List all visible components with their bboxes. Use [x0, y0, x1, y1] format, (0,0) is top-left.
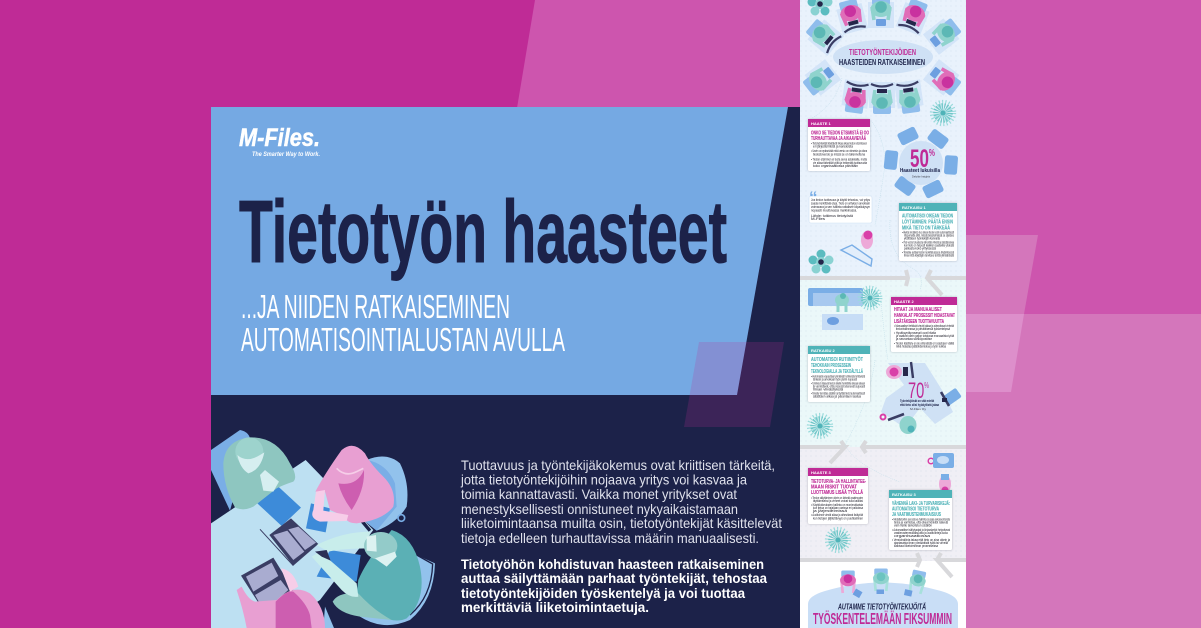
- quote box: Lähde: tutkimus tietotyöstä: [811, 214, 853, 218]
- table with 50% stat: %: [929, 148, 935, 159]
- closing dome and heading: [808, 568, 958, 628]
- intro text: [460, 457, 782, 546]
- three people: [840, 568, 928, 599]
- card: haaste 1: eri järjestelmistä ja kansioista: [813, 144, 853, 148]
- card: ratkaisu 1: • Yksi versio totuudesta vähentää virheitä ja säästää aikaa: [902, 240, 954, 244]
- title: Tietotyön haasteet: [239, 182, 727, 281]
- chair: pink person: [361, 456, 408, 532]
- card: ratkaisu 1: • Tekoäly auttaa tiedon luokittelussa ja löytämisessä: [902, 250, 954, 254]
- card: ratkaisu 1: kun tieto on helposti kaikkien saatavilla yhdestä: [904, 244, 954, 248]
- folder: [257, 487, 301, 526]
- quote box: M-Files: [811, 217, 826, 221]
- intro bold text: tietotyöntekijöiden työskentelyä ja voi tuottaa: [461, 585, 745, 601]
- person: [939, 474, 951, 494]
- table with 50% stat: Haasteet lukuisilla: [900, 168, 940, 174]
- quote box: nopeasti muuttuvassa markkinassa.: [811, 208, 857, 212]
- card: ratkaisu 3: kaikissa liiketoiminnan prosesseissa: [894, 544, 938, 548]
- card: ratkaisu 2: ja varmistavat, että prosessit etenevät sujuvasti: [812, 384, 865, 388]
- card: ratkaisu 3: organisaatiossa: [894, 534, 930, 538]
- sofa with person: [808, 288, 863, 330]
- subtitle: [241, 288, 565, 358]
- card: ratkaisu 3: • Metatietoihin perustuva hallinta suojaa arkaluontoista: [892, 518, 950, 522]
- card: haaste 1: ONKO SE TIEDON ETSIMISTÄ EI OO: [811, 130, 869, 136]
- people around the table: [800, 0, 964, 115]
- person with desk: [841, 230, 873, 266]
- card: ratkaisu 2: • Tekoäly tunnistaa sisällön ja täyttää tiedot automaattisesti: [811, 392, 865, 396]
- heading ellipse: [833, 40, 933, 74]
- top plant: [808, 0, 832, 16]
- pink person: [312, 446, 394, 523]
- 70% stat group: Työntekijöistä on sitä mieltä: [900, 399, 934, 403]
- card: ratkaisu 3: [889, 490, 952, 550]
- card: ratkaisu 2: tärkeän ja arvokkaan työn pariin nopeasti: [813, 378, 857, 382]
- card: haaste 2: ja vaativat usein paljon toistuvaa manuaalista työtä: [895, 334, 954, 338]
- table: [211, 460, 373, 628]
- card: haaste 2: LISÄTÄKSEEN TUOTTAVUUTTA: [894, 318, 944, 325]
- card: haaste 2: • Tiedon käsittely ei ole yhtenäistä eri osastojen välillä: [894, 342, 954, 346]
- intro text: liiketoimintaansa muilta osin, tietotyöntekijät käsittelevät: [461, 515, 782, 531]
- icon: coffee cup: [928, 453, 954, 468]
- table with 50% stat: [884, 126, 958, 199]
- intro text: toimia kannattavasti. Vaikka monet yritykset ovat: [461, 486, 737, 502]
- teal person: [312, 530, 435, 625]
- card: haaste 1: TURHAUTTAVAA JA AIKAAVIEVÄÄ: [811, 135, 866, 142]
- card: haaste 2: tiedonhallinnassa ja päivittäisessä työskentelyssä: [896, 327, 950, 331]
- card: haaste 1: tiedostoversio ja missä se on tallennettuna: [813, 152, 865, 156]
- closing dome and heading: AUTAMME TIETOTYÖNTEKIJÖITÄ: [837, 602, 926, 612]
- heading ellipse: TIETOTYÖNTEKIJÖIDEN: [849, 48, 916, 57]
- 70% stat group: 70: [908, 378, 932, 403]
- card: ratkaisu 3: ajantasaista ilman ylimääräistä työtä tai virheitä: [894, 541, 948, 545]
- card: haaste 1: • Usein on epäselvää mikä versio on viimeisin ja oikea: [811, 149, 867, 153]
- table with 50% stat: Deloitte Insights: [912, 174, 930, 178]
- bottom pink person: [237, 568, 334, 628]
- card: haaste 1: vie aikaa tärkeältä työltä ja heikentää tuottavuutta: [813, 161, 867, 165]
- chair: green person: [211, 430, 250, 511]
- card: haaste 3: [808, 468, 868, 524]
- card: haaste 3: täyttämiseksi ja virheet voivat tulla kalliiksi: [813, 499, 863, 503]
- quote box: “: [809, 188, 818, 207]
- card: haaste 2: HANKALAT PROSESSIT HIDASTAVAT: [894, 313, 955, 319]
- card: ratkaisu 1: ilman että käyttäjän tarvitsee tehdä ylimääräistä: [904, 254, 954, 258]
- laptop: [260, 518, 318, 566]
- card: haaste 1: [808, 119, 870, 171]
- card: haaste 2: [891, 297, 957, 352]
- card: ratkaisu 3: • Automaattiset säilytysajat ja kirjausketjut helpottavat: [892, 528, 950, 532]
- card: ratkaisu 1: yksittäisen työntekijän kannalta: [904, 236, 940, 240]
- card: ratkaisu 3: AUTOMATISOI TIETOTURVA: [892, 506, 939, 512]
- card: ratkaisu 2: • Automaatio vapauttaa työntekijät rutiineista tehtävistä: [811, 374, 865, 378]
- panel: infographic strip: [800, 0, 966, 628]
- intro text: tietoja edelleen turhauttavissa määrin manuaalisesti.: [461, 530, 759, 546]
- card: haaste 3: ja järjestelmissä: [812, 509, 847, 513]
- card: haaste 2: HAASTE 2: [894, 299, 915, 304]
- plant: [831, 533, 845, 547]
- 70% stat group: %: [924, 381, 929, 390]
- card: haaste 3: • Tiedon säilyttäminen oikein on tärkeää vaatimusten: [811, 496, 863, 500]
- closing dome and heading: TYÖSKENTELEMÄÄN FIKSUMMIN: [813, 609, 952, 628]
- card: ratkaisu 3: vaatimustenmukaisuutta ja auditointeja koko: [894, 531, 948, 535]
- card: haaste 3: TIETOTURVA- JA HALLINTATEE-: [811, 479, 866, 485]
- card: haaste 3: kun tietoa on hajallaan useissa eri paikoissa: [813, 506, 863, 510]
- plant: [808, 250, 834, 274]
- intro text: menestyksellisesti onnistuneet nykyaikaistamaan: [461, 501, 738, 517]
- paper: [306, 503, 330, 532]
- plant: [864, 292, 876, 304]
- card: haaste 1: koko organisaatiossa päivittäin: [813, 164, 858, 168]
- quote box: [809, 188, 872, 223]
- card: ratkaisu 2: RATKAISU 2: [811, 348, 835, 353]
- quote box: Jos tiedon tuottavuus ja käyttö tehostuu, voi yritys: [811, 198, 870, 202]
- subtitle: AUTOMATISOINTIALUSTAN AVULLA: [241, 321, 565, 358]
- card: ratkaisu 3: RATKAISU 3: [892, 492, 916, 497]
- card: haaste 2: ja seurantaa sähköpostitse: [895, 337, 932, 341]
- subtitle: ...JA NIIDEN RATKAISEMINEN: [241, 288, 510, 325]
- card: haaste 3: HAASTE 3: [811, 470, 832, 475]
- quote box: voimavara ja sen hallinta ratkaisee kilpailukyvyn: [811, 205, 870, 209]
- card: ratkaisu 1: LÖYTÄMINEN: PÄÄTÄ ENSIN: [902, 218, 953, 226]
- 70% stat group: M-Files Oy: [910, 407, 927, 411]
- card: haaste 2: • Manuaaliset tehtävät vievät aikaa ja aiheuttavat virheitä: [894, 324, 954, 328]
- card: haaste 1: HAASTE 1: [811, 121, 832, 126]
- card: ratkaisu 2: ilman viivästyksiä: [813, 388, 843, 392]
- card: ratkaisu 3: • Versiohallinta takaa että tieto on aina oikein ja: [892, 538, 950, 542]
- table with 50% stat: 50: [910, 145, 938, 173]
- card: ratkaisu 2: TEHOKKAIN PROSESSEIN: [811, 363, 851, 369]
- translucent parallelogram: [684, 342, 784, 427]
- card: ratkaisu 3: vain heille tarkoitetun sisällön: [894, 524, 932, 528]
- card: ratkaisu 3: tietoa ja varmistaa, että oikeat henkilöt näkevät: [894, 520, 948, 524]
- card: ratkaisu 1: [899, 203, 957, 261]
- card: ratkaisu 2: säästäen aikaa ja parantaen laatua: [813, 394, 861, 398]
- logo: M-Files: The Smarter Way to Work.: [252, 151, 320, 158]
- card: haaste 3: • Käyttöoikeuksien hallinta on monimutkaista: [811, 503, 863, 507]
- tablet: [241, 558, 294, 602]
- intro bold text: auttaa säilyttämään parhaat työntekijät, tehostaa: [461, 570, 767, 586]
- intro text: Tuottavuus ja työntekijäkokemus ovat kriittisen tärkeitä,: [461, 457, 775, 473]
- card: haaste 3: kun tietojen jäljitettävyys on puutteellinen: [813, 516, 863, 520]
- green person: [223, 437, 295, 509]
- card: ratkaisu 2: • Työnkulut ohjaavat tiedon oikeille henkilöille oikeaan aikaan: [811, 382, 865, 386]
- card: haaste 3: LUOTTAMUS LISÄÄ TYÖLLÄ: [811, 489, 863, 496]
- card: ratkaisu 3: VÄHENNÄ LAKI- JA TURVARISKEJÄ:: [892, 500, 950, 507]
- 70% stat group: että tieto olisi hyödyllistä jakaa: [900, 403, 939, 407]
- plant: [813, 419, 827, 433]
- card: ratkaisu 2: AUTOMATISOI RUTIINITYÖT: [811, 356, 864, 363]
- card: haaste 2: • Hyväksyntäprosessit ovat hitaita: [894, 331, 936, 335]
- card: haaste 2: HITAAT JA MANUAALISET: [894, 307, 942, 313]
- plant: [936, 106, 950, 120]
- card: haaste 3: MAAN RISKIT TUOVAT: [811, 484, 858, 490]
- 70% stat group: [880, 362, 962, 434]
- heading ellipse: HAASTEIDEN RATKAISEMINEN: [839, 58, 925, 67]
- dotted connector lines: [812, 78, 921, 482]
- intro bold text: merkittäviä liiketoimintaetuja.: [461, 599, 649, 615]
- blue title panel: [211, 107, 788, 395]
- intro bold text: [461, 556, 767, 615]
- card: ratkaisu 1: RATKAISU 1: [902, 205, 926, 210]
- panel: report cover: [211, 107, 800, 628]
- card: ratkaisu 2: TEKNOLOGIALLA JA TEKOÄLYLLÄ: [811, 368, 863, 375]
- illustration: team around table: [211, 430, 435, 628]
- logo: M-Files: M-Files.: [239, 124, 320, 152]
- card: ratkaisu 1: riippumatta siitä, missä järjestelmässä se sijaitsee: [904, 234, 954, 238]
- card: haaste 1: • Tiedon etsiminen ei tuota arvoa asiakkaille, mutta: [811, 158, 867, 162]
- card: ratkaisu 1: paikasta koko yrityksessä: [904, 246, 936, 250]
- intro bold text: Tietotyöhön kohdistuvan haasteen ratkaiseminen: [461, 556, 764, 572]
- quote box: saada merkittäviä etuja. Tieto on yrityksen arvokkain: [811, 202, 870, 206]
- card: ratkaisu 1: • Älykäs metatieto tuo oikean tiedon esiin automaattisesti: [902, 230, 954, 234]
- card: ratkaisu 1: MIKÄ TIETO ON TÄRKEÄÄ: [902, 224, 950, 232]
- card: ratkaisu 3: JA VAATIMUSTENMUKAISUUS: [892, 512, 941, 518]
- card: ratkaisu 1: AUTOMATISOI OIKEAN TIEDON: [902, 214, 953, 220]
- card: ratkaisu 2: [808, 346, 870, 402]
- card: haaste 3: • Auditoinnit vievät aikaa ja aiheuttavat lisätyötä: [811, 513, 863, 517]
- card: haaste 2: mikä hidastaa päätöksentekoa ja työn kulkua: [896, 344, 946, 348]
- card: haaste 1: • Tietotyöntekijät käyttävät liikaa aikaa tiedon etsimiseen: [811, 142, 867, 146]
- intro text: jotta tietotyöntekijöihin nojaava yritys voi kasvaa ja: [460, 472, 747, 488]
- separator arrows: [800, 270, 966, 577]
